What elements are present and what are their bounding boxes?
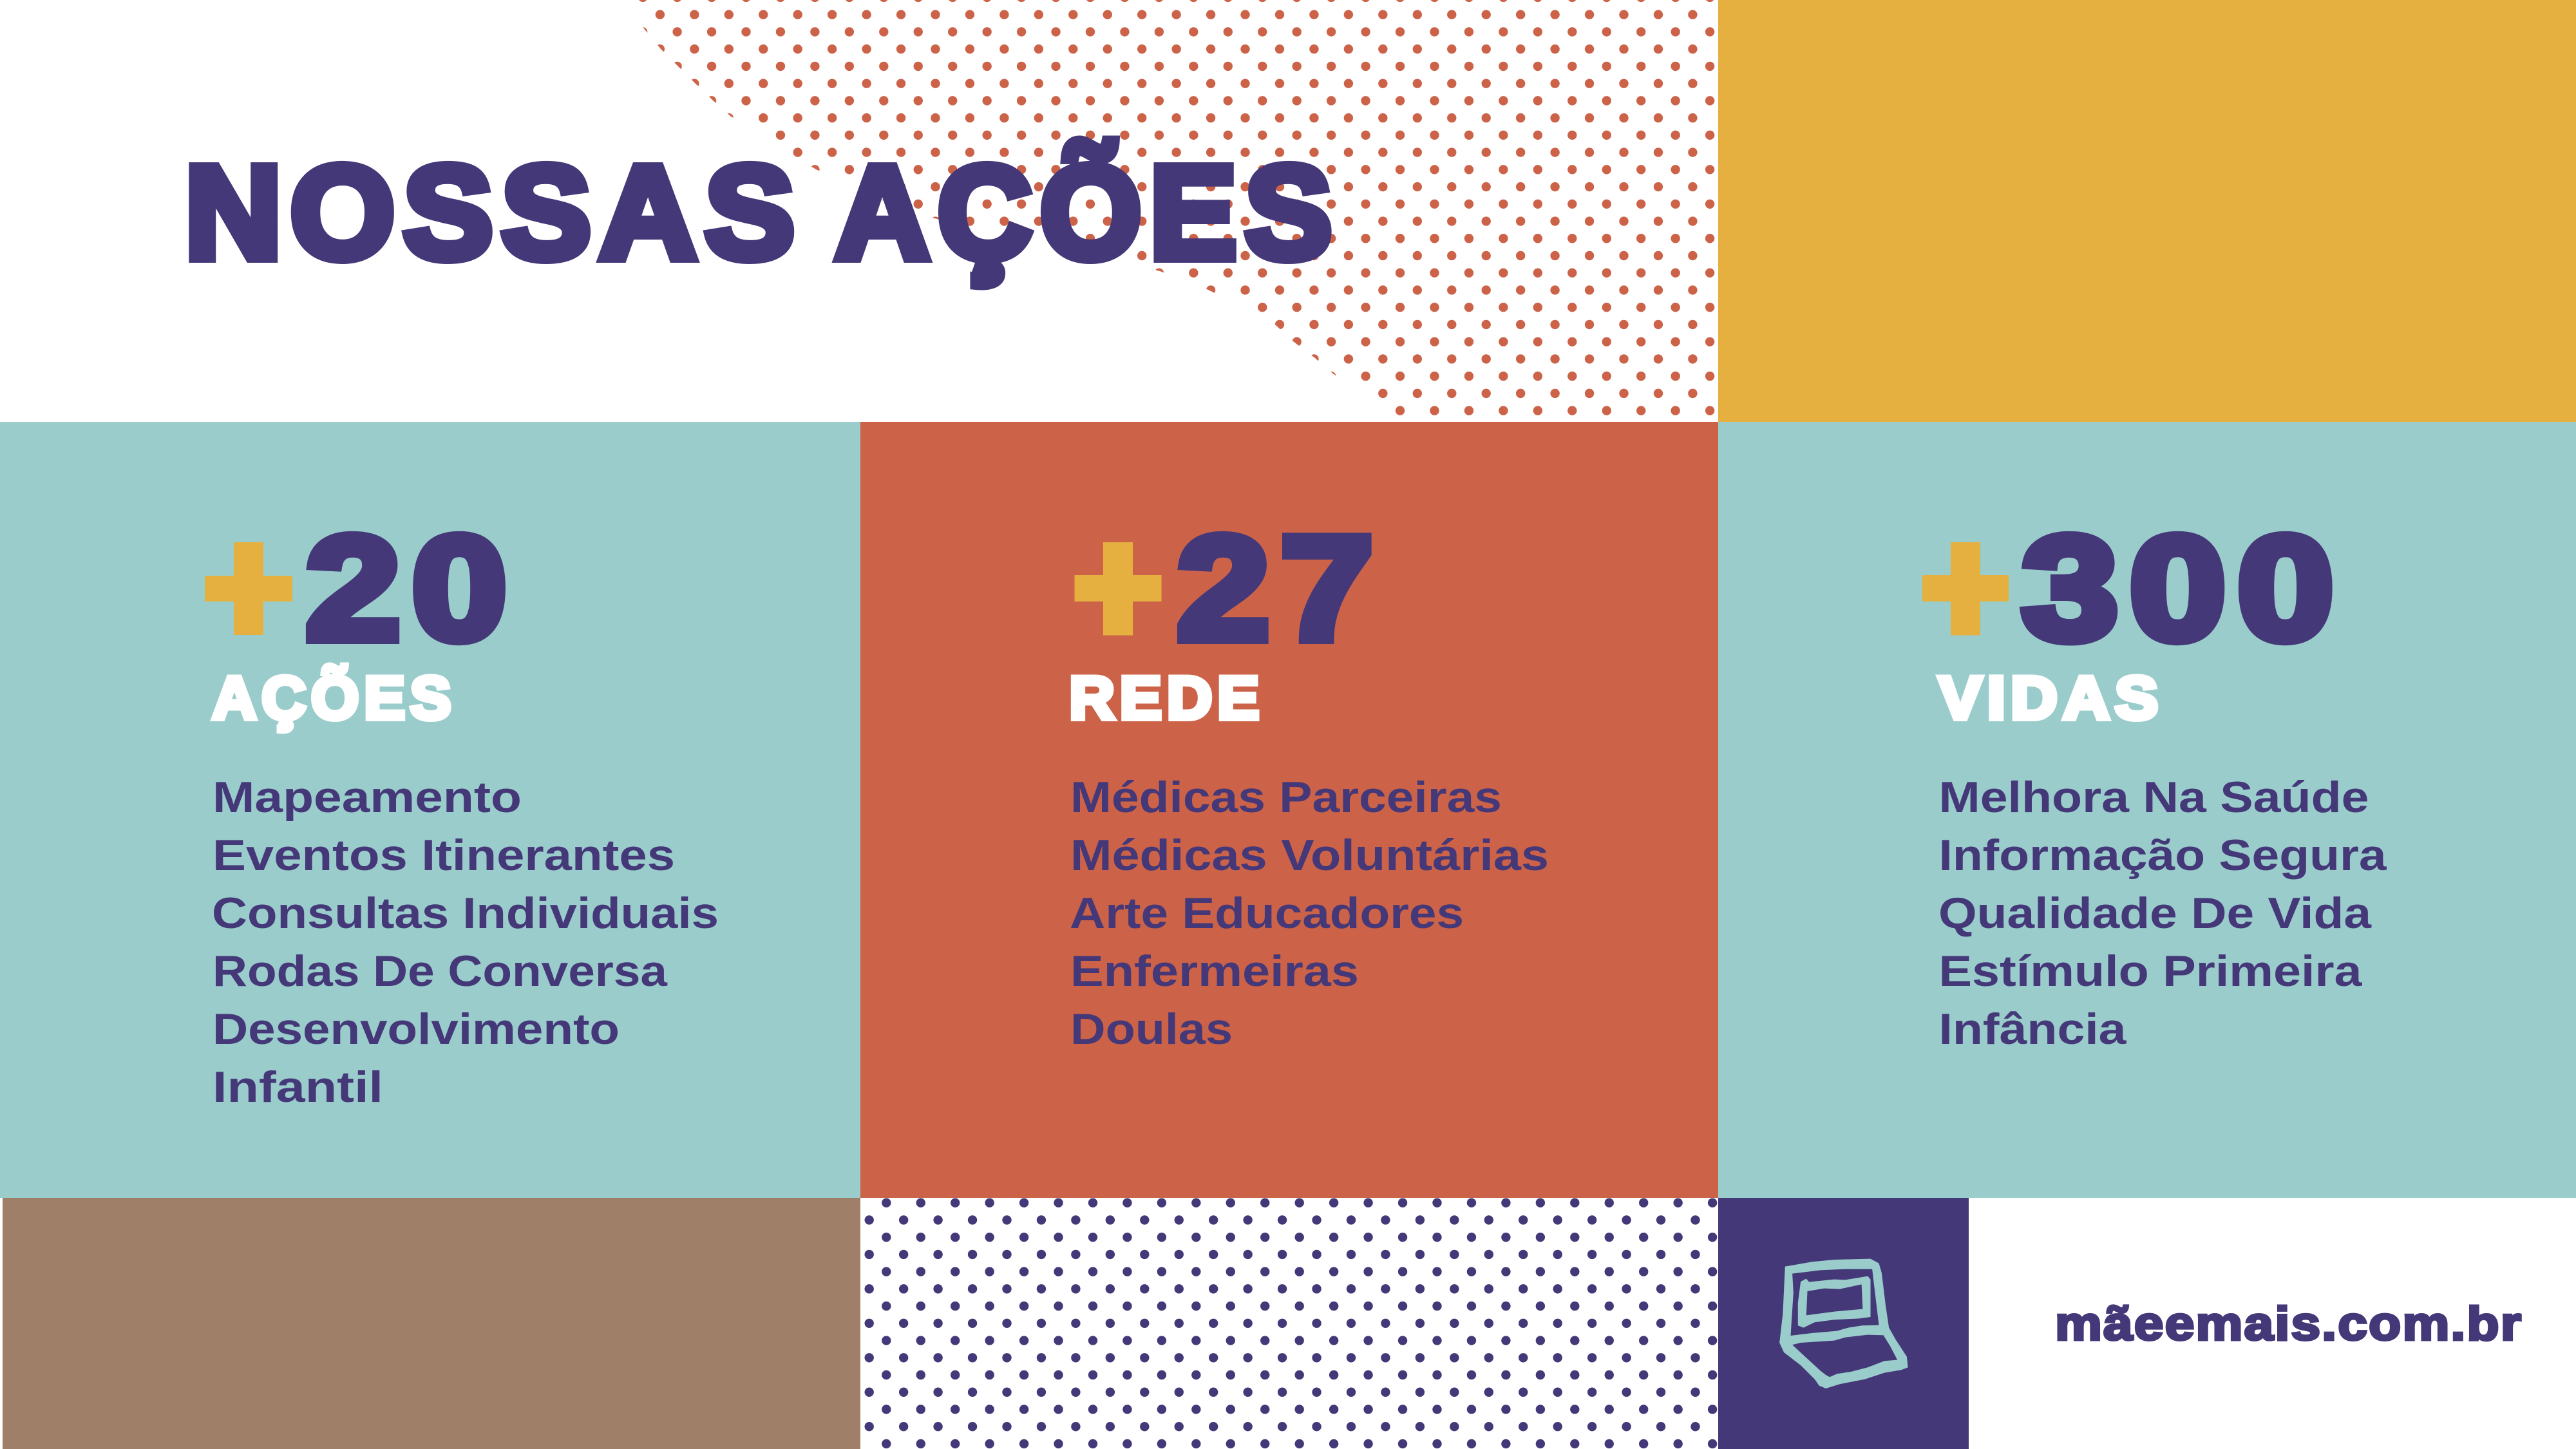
list: ações: Consultas Individuais xyxy=(212,889,719,938)
heading: vidas: VIDAS xyxy=(1938,664,2164,732)
list: vidas: Informação Segura xyxy=(1938,831,2387,880)
icon: laptop xyxy=(1779,1259,1908,1388)
panel: purple icon block xyxy=(1718,1198,1969,1449)
list: rede: Doulas xyxy=(1070,1005,1233,1054)
list: ações: Eventos Itinerantes xyxy=(213,831,675,880)
list: vidas xyxy=(1938,773,2387,1054)
panel: brown block xyxy=(3,1198,860,1449)
list: ações xyxy=(212,773,719,1112)
number: 300: 300 xyxy=(2022,507,2345,670)
list: vidas: Qualidade De Vida xyxy=(1938,889,2372,938)
heading: rede: REDE xyxy=(1069,664,1265,732)
list: ações: Desenvolvimento xyxy=(213,1005,620,1054)
list: rede: Arte Educadores xyxy=(1070,889,1464,938)
panel: ações xyxy=(0,422,860,1198)
list: rede: Enfermeiras xyxy=(1070,947,1359,996)
list: vidas: Melhora Na Saúde xyxy=(1938,773,2369,822)
list: rede: Médicas Parceiras xyxy=(1070,773,1502,822)
icon: plus yellow xyxy=(1922,542,2009,635)
panel: dotted blob top xyxy=(625,0,1718,411)
website url: mãeemais.com.br xyxy=(2055,1298,2523,1350)
title xyxy=(185,139,1340,286)
number: 27: 27 xyxy=(1177,507,1385,670)
panel: dotted block bottom xyxy=(869,1203,1718,1444)
list: rede xyxy=(1070,773,1549,1054)
title: AÇÕES xyxy=(835,139,1340,286)
panel: vidas xyxy=(1718,422,2576,1198)
icon: plus yellow xyxy=(205,542,292,635)
list: vidas: Estímulo Primeira xyxy=(1938,947,2363,996)
icon: plus yellow xyxy=(1074,542,1162,635)
list: ações: Mapeamento xyxy=(213,773,522,822)
panel: rede xyxy=(860,422,1718,1198)
title: NOSSAS xyxy=(185,139,803,286)
number: 20: 20 xyxy=(306,507,518,670)
list: ações: Rodas De Conversa xyxy=(213,947,668,996)
panel: yellow block xyxy=(1718,0,2576,422)
list: rede: Médicas Voluntárias xyxy=(1070,831,1549,880)
heading: ações: AÇÕES xyxy=(213,664,456,732)
list: ações: Infantil xyxy=(213,1063,383,1112)
list: vidas: Infância xyxy=(1938,1005,2127,1054)
